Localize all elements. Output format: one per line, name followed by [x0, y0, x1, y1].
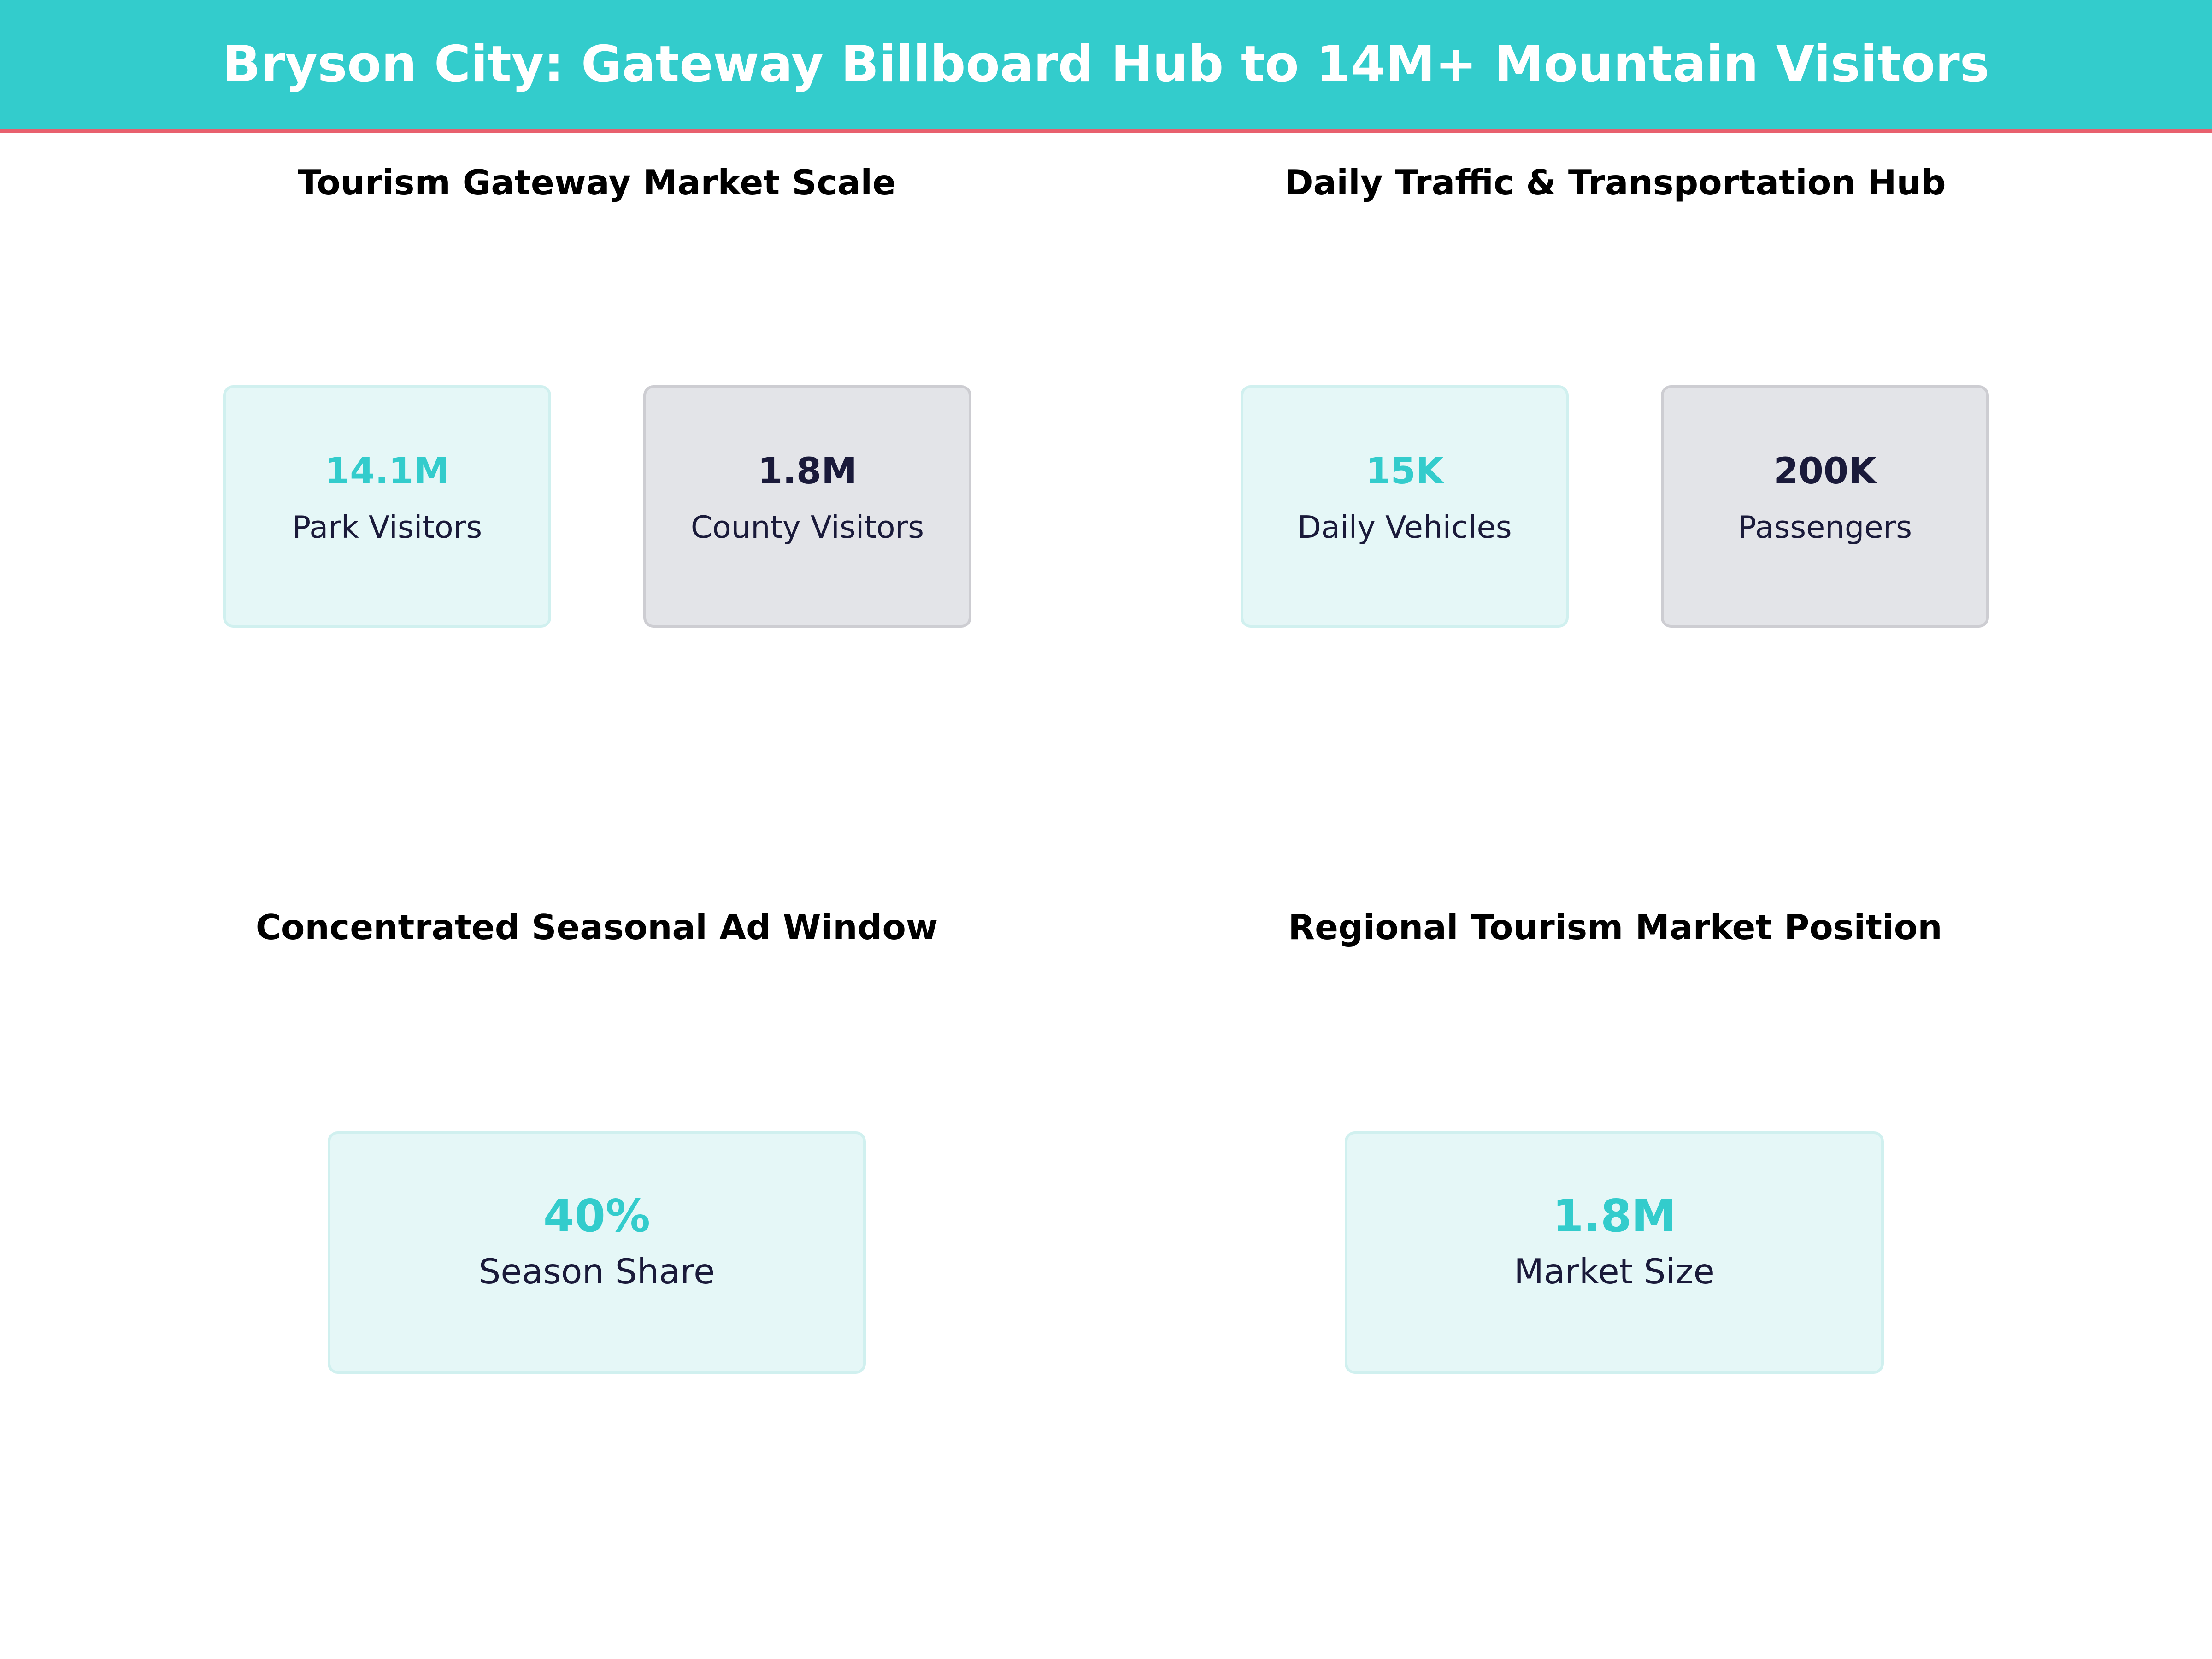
header: [0, 0, 2212, 133]
section title: tourism gateway: Tourism Gateway Market Scale: [298, 162, 896, 203]
section title: seasonal: Concentrated Seasonal Ad Window: [256, 907, 938, 947]
section title: regional: Regional Tourism Market Position: [1288, 907, 1942, 947]
card: park visitors: [223, 385, 551, 628]
card: season share: Season Share: [479, 1251, 715, 1292]
card: county visitors: County Visitors: [691, 509, 924, 545]
header: Bryson City: Gateway Billboard Hub to 14M+ Mountain Visitors: [223, 35, 1989, 93]
section title: daily traffic: Daily Traffic & Transportation Hub: [1284, 162, 1946, 203]
card: county visitors: [643, 385, 971, 628]
card: park visitors: Park Visitors: [292, 509, 482, 545]
card: county visitors: 1.8M: [758, 451, 857, 492]
card: passengers: Passengers: [1738, 509, 1912, 545]
card: daily vehicles: Daily Vehicles: [1297, 509, 1512, 545]
card: season share: 40%: [543, 1190, 650, 1242]
card: passengers: [1661, 385, 1989, 628]
card: passengers: 200K: [1773, 451, 1877, 492]
card: season share: [328, 1131, 866, 1374]
card: market size: 1.8M: [1553, 1190, 1676, 1242]
card: park visitors: 14.1M: [325, 451, 449, 492]
card: market size: Market Size: [1514, 1251, 1715, 1292]
card: daily vehicles: [1241, 385, 1569, 628]
card: daily vehicles: 15K: [1366, 451, 1443, 492]
card: market size: [1345, 1131, 1884, 1374]
